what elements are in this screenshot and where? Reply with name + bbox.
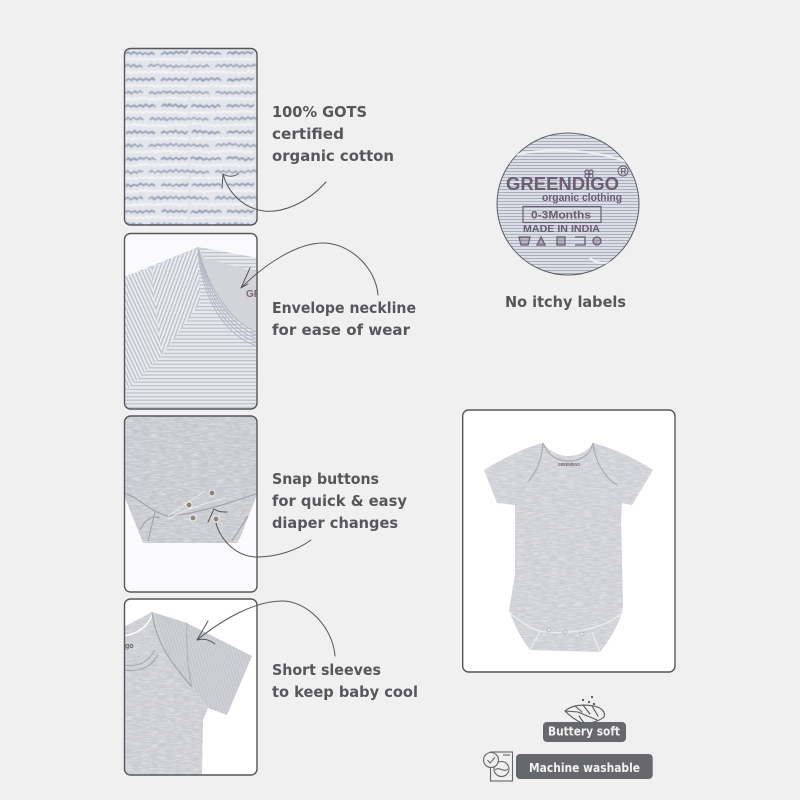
text: short sleeves: Short sleeves: [272, 661, 381, 679]
text: organic cotton: 100% GOTS: [272, 103, 367, 121]
text: snap buttons: Snap buttons: [272, 470, 379, 488]
shoulder flap: [152, 612, 192, 687]
care symbols: [519, 237, 601, 245]
text: short sleeves: to keep baby cool: [272, 683, 418, 701]
icon: washing machine: [484, 752, 512, 781]
icon: circular label close-up: [497, 133, 640, 275]
leg binding: [124, 493, 258, 541]
tagline: organic clothing: [542, 192, 622, 204]
text: envelope neckline: [272, 299, 416, 339]
inner neck: [198, 247, 258, 330]
snaps: [547, 628, 584, 636]
text: snap buttons: diaper changes: [272, 514, 398, 532]
arrow: to sleeve: [197, 601, 335, 656]
text: snap buttons: [272, 470, 407, 532]
arrow: to fabric: [222, 174, 326, 211]
panel: short sleeves photo: [124, 599, 258, 776]
snap placket: [168, 491, 225, 519]
text: organic cotton: organic cotton: [272, 147, 394, 165]
text: envelope neckline: Envelope neckline: [272, 299, 416, 317]
collar: [124, 650, 158, 670]
flower mark: [585, 170, 593, 178]
text: organic cotton: [272, 103, 394, 165]
text: no itchy labels: No itchy labels: [505, 293, 626, 311]
label print: GR: [246, 289, 262, 300]
text: organic cotton: certified: [272, 125, 344, 143]
neck label: GREENDIGO: [558, 462, 580, 467]
garment body: [124, 247, 258, 410]
label print: go: [125, 643, 134, 650]
bodysuit: [484, 443, 653, 652]
panel: snap buttons photo: [124, 416, 258, 593]
left sleeve stripes: [124, 267, 162, 393]
badge: buttery soft: [543, 722, 626, 742]
panel: full bodysuit photo: [463, 410, 675, 672]
snaps: [186, 490, 219, 522]
text: envelope neckline: for ease of wear: [272, 321, 411, 339]
panel: envelope neckline photo: [124, 233, 262, 410]
brand name: GREENDIGO: [506, 174, 619, 194]
badge: machine washable: Machine washable: [529, 761, 640, 775]
body: [124, 612, 208, 776]
garment lower: [124, 416, 258, 543]
leg bindings: [509, 612, 622, 652]
registered mark: R: [620, 167, 626, 176]
made in india: MADE IN INDIA: [523, 223, 600, 235]
panel: fabric knit close-up: [124, 48, 258, 226]
arrow: to snaps: [208, 509, 311, 557]
back collar band: [198, 247, 258, 272]
icon: feather: [565, 696, 605, 723]
arrow: to neckline: [241, 243, 378, 295]
badge: machine washable: [516, 754, 653, 779]
sleeve: [152, 612, 252, 715]
text: snap buttons: for quick & easy: [272, 492, 407, 510]
fabric fold: [516, 150, 626, 264]
badge: buttery soft: Buttery soft: [548, 724, 620, 738]
lap flap: [152, 247, 200, 355]
front neck band: [198, 247, 258, 346]
size box: 0-3Months: [531, 210, 591, 222]
neckline and flaps: [528, 443, 617, 485]
text: short sleeves: [272, 661, 418, 701]
